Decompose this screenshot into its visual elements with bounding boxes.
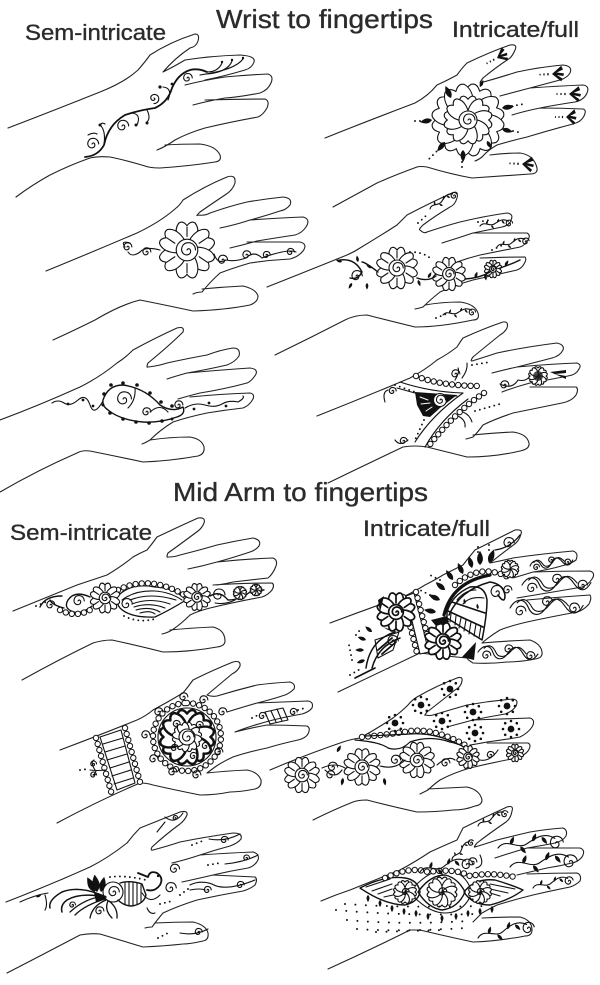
title: Mid Arm to fingertips: Mid Arm to fingertips xyxy=(173,477,428,507)
henna flowers and suns xyxy=(283,680,524,793)
henna peacock xyxy=(20,813,258,938)
hand 5: flowers and leaf vine xyxy=(267,189,530,355)
hand 2: flower and curl vine xyxy=(46,176,308,340)
label: Intricate/full, upper: Intricate/full xyxy=(452,17,579,42)
hand 6: crossed bands with dark motif xyxy=(317,322,580,483)
title: Wrist to fingertips: Wrist to fingertips xyxy=(216,4,433,34)
henna band xyxy=(36,583,264,621)
henna bands xyxy=(384,362,566,447)
wrist band xyxy=(100,730,135,790)
label: Intricate/full, lower: Intricate/full xyxy=(363,516,490,541)
henna paisley xyxy=(52,381,243,425)
henna dense design xyxy=(349,535,591,678)
henna vine xyxy=(85,57,244,157)
henna eye chain xyxy=(336,807,578,947)
henna flower xyxy=(123,222,296,278)
label: Sem-intricate, upper: Sem-intricate xyxy=(25,20,166,45)
label: Sem-intricate, lower: Sem-intricate xyxy=(10,520,152,545)
hand 11: dot suns and flower chain xyxy=(270,677,534,820)
henna floral vine xyxy=(335,189,530,320)
hand 4: mandala with fingertip combs xyxy=(325,45,588,207)
hand 12: eye chain and dot grid xyxy=(321,806,584,969)
hand 1: wrist semi-intricate vine xyxy=(8,34,272,197)
henna mandala xyxy=(80,693,305,795)
hand 7: long arm band with paisley xyxy=(13,518,277,680)
finger band xyxy=(265,708,288,724)
hand 9: peacock motif xyxy=(6,811,258,973)
hand 10: dense full arm design xyxy=(330,530,594,692)
hand 8: round mandala and wrist band xyxy=(57,662,312,823)
henna mandala xyxy=(410,46,581,172)
hand 3: paisley with dots xyxy=(0,328,256,492)
